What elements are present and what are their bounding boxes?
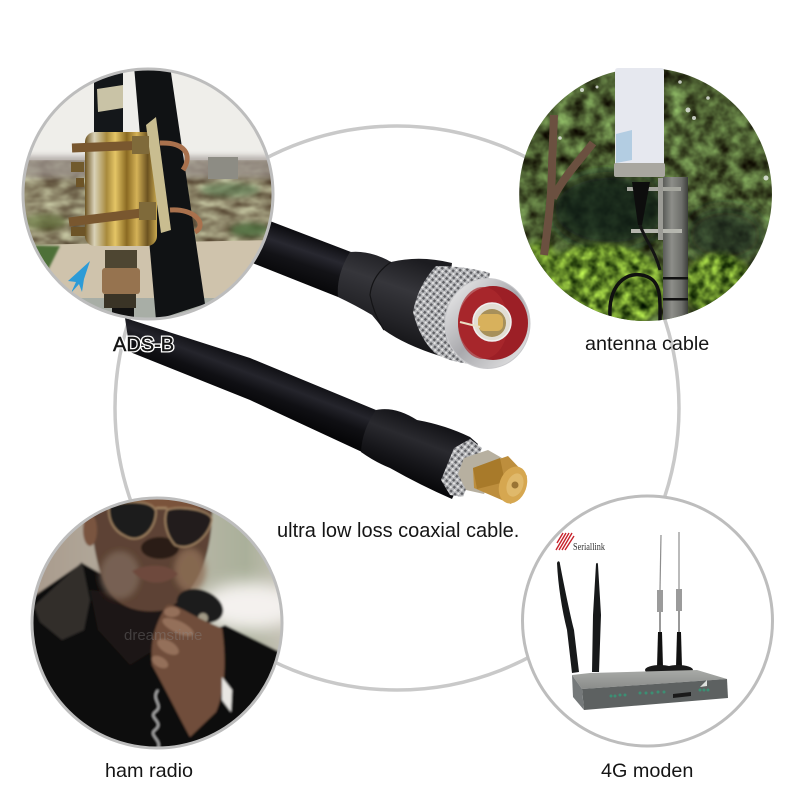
silver ferrule bbox=[441, 439, 482, 497]
gold connector tip bbox=[494, 463, 532, 507]
wifi antenna left bbox=[557, 561, 579, 673]
back antenna bbox=[94, 73, 123, 132]
sleeve seam bbox=[370, 262, 391, 330]
lips bbox=[132, 566, 178, 583]
blurred background bbox=[36, 512, 280, 652]
router top bbox=[572, 670, 727, 689]
collar bbox=[34, 562, 90, 640]
radome print bbox=[616, 130, 632, 163]
steel pole bbox=[663, 177, 688, 322]
tree foliage bbox=[519, 68, 773, 322]
photo circle: ADS-B antenna mount bbox=[20, 66, 276, 324]
city view bbox=[20, 160, 276, 250]
gold barrel bbox=[85, 132, 157, 246]
heat shrink sleeve bbox=[338, 252, 452, 356]
neck bbox=[90, 590, 190, 665]
photo circle: ham radio operator bbox=[30, 496, 284, 750]
blue arrow bbox=[68, 261, 90, 293]
black jacket bbox=[34, 562, 278, 746]
photo circle: antenna cable bbox=[519, 68, 773, 322]
bright streak bbox=[200, 582, 300, 630]
pole straps bbox=[663, 277, 688, 280]
microphone bbox=[172, 583, 228, 629]
fingers bbox=[150, 607, 196, 671]
forehead bbox=[135, 500, 200, 510]
cable with SMA connector bbox=[125, 318, 532, 507]
label: antenna cable: antenna cable bbox=[585, 333, 709, 355]
magnetic antenna right bbox=[663, 532, 693, 675]
steel plate bbox=[146, 117, 171, 233]
SeriaLink logo bbox=[556, 533, 605, 553]
ham radio border bbox=[32, 498, 282, 748]
router left side bbox=[572, 675, 584, 710]
cable loop bbox=[610, 275, 660, 322]
logo stripes bbox=[556, 533, 574, 550]
label: ultra low loss coaxial cable: ultra low loss coaxial cable. bbox=[277, 520, 519, 542]
antenna lead bbox=[632, 182, 650, 225]
radome steel base bbox=[614, 163, 665, 177]
ear bbox=[83, 514, 97, 546]
U bolts bbox=[160, 143, 187, 170]
coiled mic cord bbox=[153, 690, 159, 748]
head bbox=[92, 497, 212, 611]
status LEDs bbox=[610, 688, 710, 698]
tree trunk bbox=[544, 115, 593, 255]
label: ADS-B: ADS-B bbox=[113, 334, 174, 356]
label: ADS-B: ADS-B bbox=[113, 334, 174, 356]
cable with N connector bbox=[250, 218, 530, 368]
cable jacket bbox=[250, 218, 351, 297]
silver connector ring bbox=[445, 278, 530, 368]
SIM slot bbox=[673, 692, 691, 698]
hand bbox=[152, 605, 224, 737]
rooftop bbox=[36, 240, 262, 298]
photo circle: 4G modem bbox=[522, 496, 772, 746]
shadow inside trees bbox=[550, 172, 670, 248]
connecting ring bbox=[115, 126, 679, 690]
mounting pole bbox=[134, 66, 205, 320]
small bolts bbox=[71, 162, 84, 172]
nose bbox=[141, 537, 179, 559]
ADS-B border bbox=[23, 69, 273, 319]
cuff bbox=[222, 677, 232, 712]
router front bbox=[582, 679, 728, 710]
green patches bbox=[23, 214, 67, 230]
leaf gaps bbox=[558, 80, 768, 180]
circle fill and border bbox=[522, 496, 772, 746]
watermark: dreamstime bbox=[124, 627, 202, 644]
gold pin bbox=[478, 314, 503, 331]
label: ham radio: ham radio bbox=[105, 760, 193, 782]
heat shrink sleeve bbox=[361, 409, 478, 499]
distant building bbox=[208, 157, 238, 179]
knurled collar bbox=[413, 266, 490, 364]
bottom bolt bbox=[69, 212, 150, 222]
mic emblem bbox=[198, 613, 208, 623]
logo wordmark: Seriallink bbox=[573, 541, 605, 553]
N connector on barrel bbox=[105, 250, 137, 268]
sunglasses bbox=[109, 502, 212, 547]
red insulator bbox=[458, 286, 528, 360]
cheek highlight bbox=[174, 548, 206, 592]
label: 4G moden: 4G moden bbox=[601, 760, 693, 782]
gold hex nut bbox=[473, 456, 527, 504]
photo content bbox=[34, 500, 280, 746]
bright shrubs bbox=[528, 238, 750, 321]
white radome bbox=[615, 68, 664, 165]
antenna label bbox=[97, 85, 123, 112]
clamps bbox=[627, 187, 681, 191]
magnetic antenna left bbox=[645, 535, 675, 675]
sky bbox=[30, 72, 266, 160]
centre ring bbox=[473, 303, 511, 341]
silver barrel bbox=[458, 450, 502, 494]
top bolt bbox=[72, 145, 148, 148]
cable jacket bbox=[125, 318, 376, 452]
router bbox=[572, 670, 728, 710]
wifi antenna right bbox=[592, 563, 601, 672]
signal icon bbox=[700, 680, 707, 687]
